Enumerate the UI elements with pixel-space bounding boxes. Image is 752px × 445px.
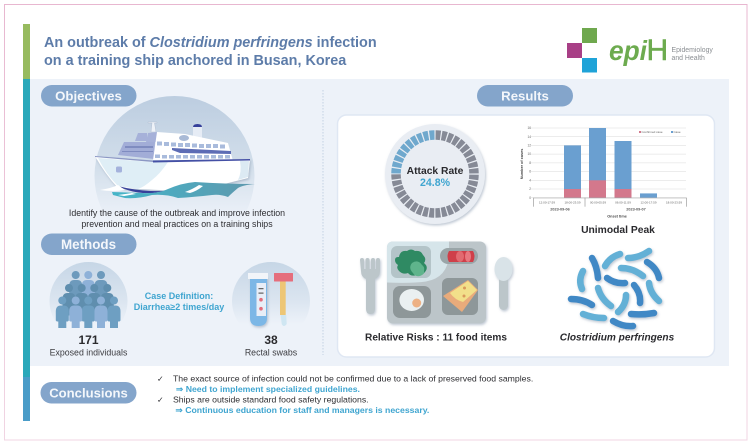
- chart y axis title: Number of cases: [520, 149, 524, 179]
- conclusions text: Ships are outside standard food safety regulations.: [173, 394, 369, 404]
- heading: Conclusions: Conclusions: [49, 386, 128, 401]
- conclusions text: ✓: [157, 374, 164, 384]
- chart: onset time epidemic curve: Onset time: [607, 214, 627, 218]
- caption: unimodal peak: Unimodal Peak: [581, 225, 655, 236]
- case definition: Diarrhea≥2 times/day: [134, 302, 224, 312]
- logo: epiH: H: [646, 34, 668, 67]
- caption: relative risks: Relative Risks : 11 food items: [365, 332, 507, 344]
- conclusions text: [157, 374, 533, 415]
- icon: cruise ship: [94, 96, 255, 256]
- chart y axis labels: 8: [529, 161, 531, 165]
- case definition: [134, 291, 224, 312]
- icon: rectal swabs: [232, 262, 310, 340]
- chart y axis labels: 16: [527, 126, 531, 130]
- ship hull: [95, 156, 250, 191]
- ship funnel: [193, 124, 202, 143]
- chart legend: Confirmed case: [642, 130, 663, 134]
- stat: rectal swabs: 38: [264, 333, 278, 347]
- heading: Results: Results: [501, 89, 549, 104]
- green accent bar: [23, 24, 30, 79]
- chart y axis labels: 2: [529, 187, 531, 191]
- main background panel: [30, 79, 729, 366]
- tomato compartment: [440, 248, 478, 264]
- chart: onset time epidemic curve: [520, 126, 686, 218]
- ship mast: [148, 122, 157, 132]
- teal accent bar: [23, 79, 30, 377]
- objectives text: [69, 208, 285, 229]
- title: on a training ship anchored in Busan, Korea: [44, 53, 347, 69]
- objectives text: Identify the cause of the outbreak and improve infection: [69, 208, 285, 218]
- objectives text: prevention and meal practices on a training ships: [81, 219, 273, 229]
- chart bars: confirmed case: [564, 180, 632, 198]
- heading: Methods: [41, 234, 136, 255]
- stat: exposed individuals: Exposed individuals: [50, 348, 128, 358]
- swab: [280, 281, 286, 315]
- ship waves: [112, 182, 255, 198]
- icon: meal tray: [387, 242, 486, 324]
- heading: Objectives: [41, 85, 136, 106]
- chart: onset time epidemic curve: 2023-09-07: [626, 208, 646, 212]
- divider: [322, 90, 324, 355]
- chart: onset time epidemic curve: 18:00-23:59: [666, 200, 682, 204]
- chart y axis labels: 14: [527, 135, 531, 139]
- title: An outbreak of Clostridium perfringens infection: [44, 35, 377, 51]
- chart: onset time epidemic curve: 00:00-05:59: [590, 200, 606, 204]
- icon: bacteria: [571, 251, 659, 326]
- icon: fork: [360, 258, 380, 314]
- conclusions text: ⇒ Need to implement specialized guidelines.: [176, 384, 360, 394]
- heading: Results: [477, 85, 573, 106]
- blue accent bar: [23, 377, 30, 421]
- test tube: [250, 277, 267, 326]
- chart y axis labels: 12: [527, 144, 531, 148]
- chart x axis: [534, 198, 686, 207]
- panel: results card: [338, 115, 714, 357]
- icon: exposed people: [50, 262, 128, 340]
- stat: exposed individuals: [50, 333, 128, 358]
- chart: onset time epidemic curve: 12:00-17:59: [640, 200, 657, 204]
- chart: onset time epidemic curve: 06:00-11:59: [615, 200, 631, 204]
- logo: epiH: Epidemiology: [672, 47, 713, 54]
- chart: attack rate dial: 24.8%: [420, 177, 451, 189]
- conclusions text: ⇒ Continuous education for staff and managers is necessary.: [176, 405, 429, 415]
- toast compartment: [442, 278, 478, 315]
- logo: epiH: and Health: [672, 55, 705, 62]
- conclusions text: The exact source of infection could not be confirmed due to a lack of preserved food samples.: [173, 374, 533, 384]
- chart y axis labels: 10: [527, 152, 531, 156]
- conclusions text: ✓: [157, 396, 164, 404]
- chart y axis labels: 6: [529, 170, 531, 174]
- chart: onset time epidemic curve: 12:00-17:59: [539, 200, 555, 204]
- icon: spoon: [494, 257, 512, 310]
- chart bars: case: [564, 128, 657, 198]
- heading: Objectives: Objectives: [55, 89, 122, 104]
- chart: onset time epidemic curve: 2023-09-06: [550, 208, 570, 212]
- stat: exposed individuals: 171: [78, 333, 99, 347]
- chart y axis labels: 0: [529, 196, 531, 200]
- broccoli compartment: [391, 246, 431, 278]
- ship bridge: [135, 132, 158, 142]
- chart y axis labels: [527, 126, 531, 200]
- heading: Methods: Methods: [61, 237, 116, 252]
- logo: epiH: [567, 28, 713, 72]
- ship superstructure: [153, 132, 233, 161]
- chart y axis labels: 4: [529, 178, 531, 182]
- chart: attack rate dial: Attack Rate: [407, 166, 464, 177]
- chart legend: [639, 130, 681, 134]
- stat: rectal swabs: Rectal swabs: [245, 348, 298, 358]
- chart: attack rate dial: [385, 124, 485, 224]
- case definition: Case Definition:: [145, 291, 213, 301]
- chart: onset time epidemic curve: 18:00-23:59: [564, 200, 581, 204]
- caption: Clostridium perfringens: Clostridium perfringens: [560, 332, 675, 344]
- chart legend: Case: [674, 130, 681, 134]
- stat: rectal swabs: [245, 333, 298, 358]
- egg compartment: [393, 286, 431, 318]
- logo: epiH: epi: [609, 35, 648, 66]
- heading: Conclusions: [40, 382, 136, 404]
